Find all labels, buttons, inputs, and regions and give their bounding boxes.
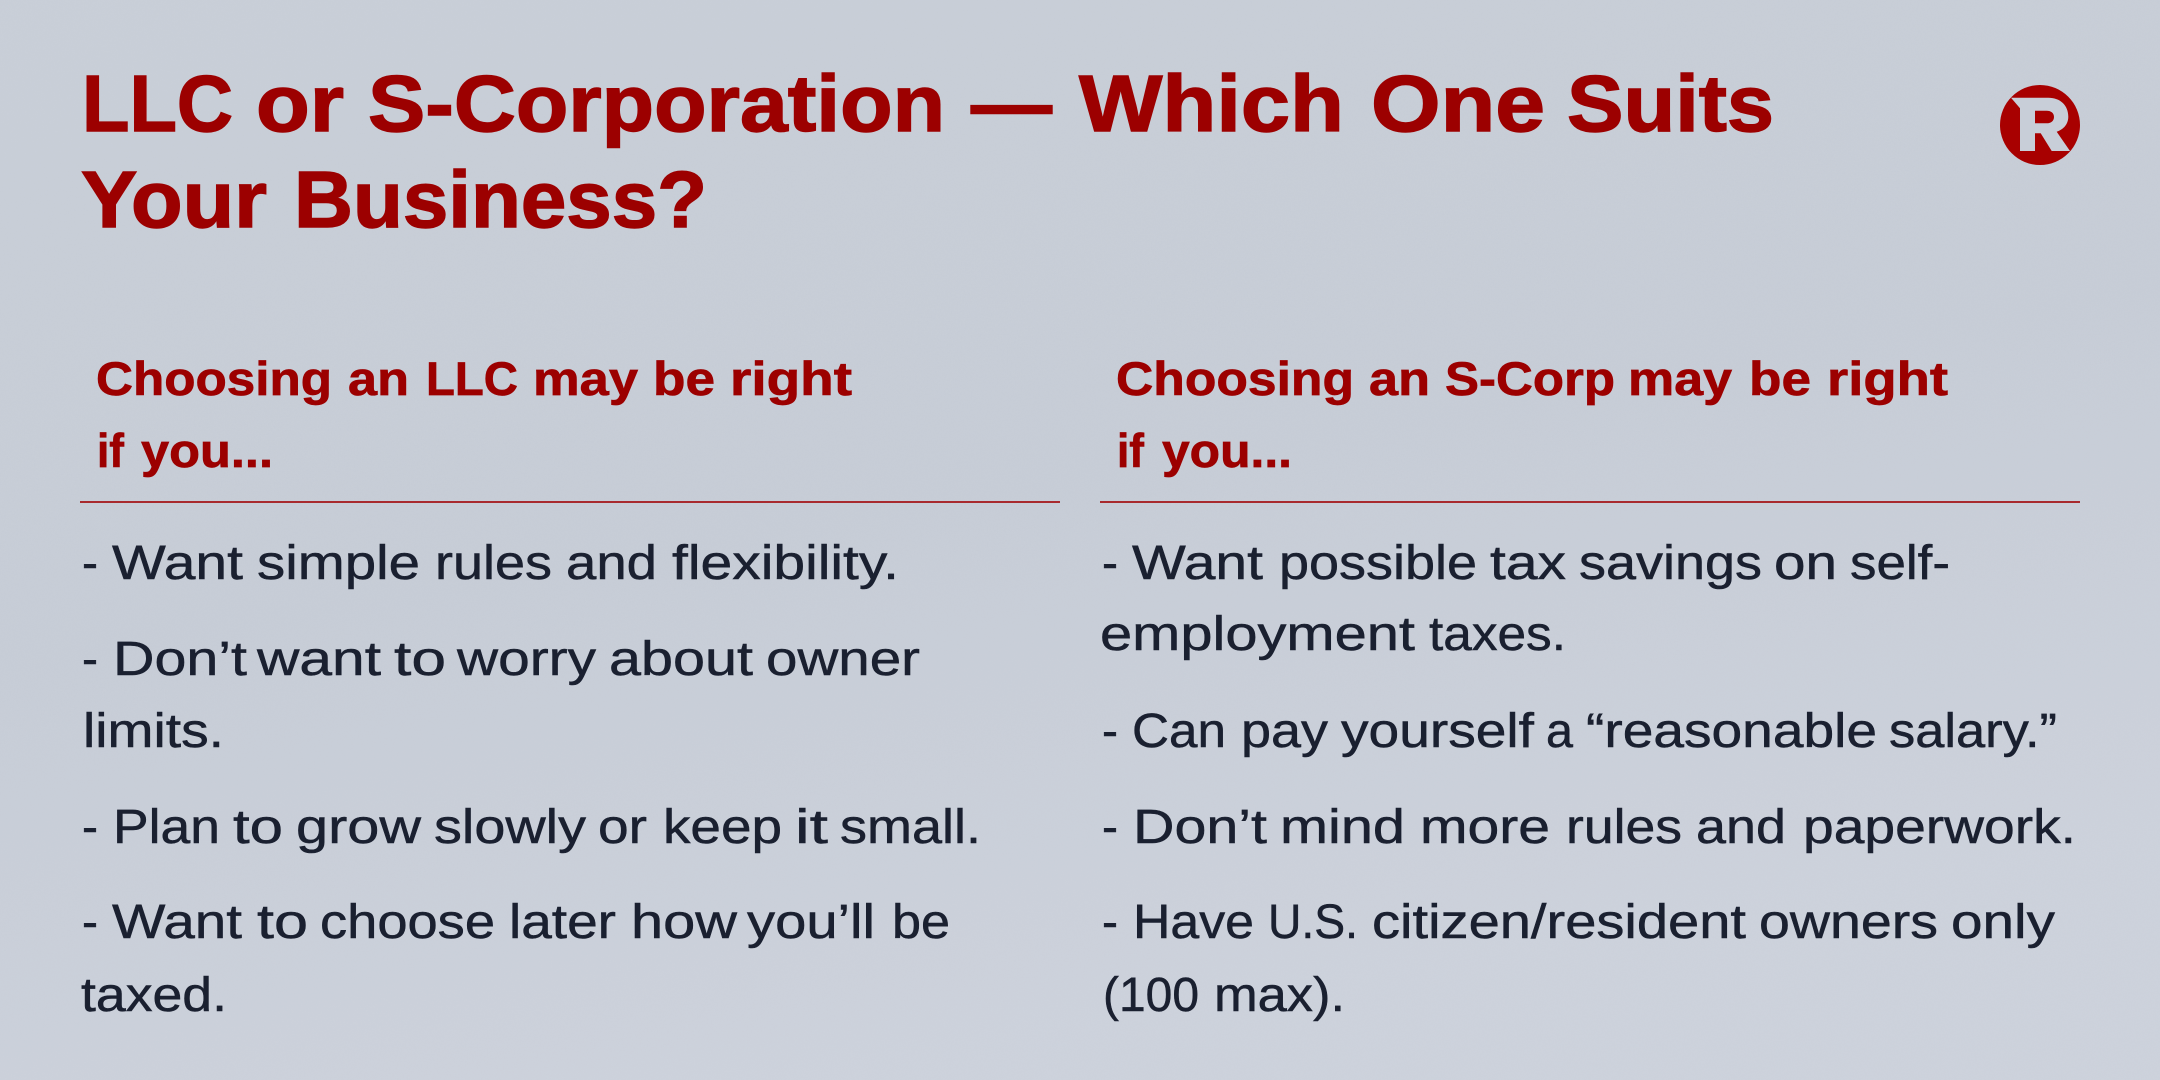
text block: LLC reasons: Don’t (113, 633, 247, 686)
text block: LLC reasons: to (394, 633, 446, 686)
text block: S-Corp reasons: Can (1132, 705, 1226, 758)
text block: LLC reasons: small. (840, 801, 981, 854)
heading: LLC: you... (141, 424, 273, 477)
icon: R logo (2000, 85, 2080, 165)
text block: LLC reasons: owner (766, 633, 920, 686)
text block: LLC reasons: - (82, 801, 98, 854)
text block: LLC reasons: keep (663, 801, 782, 854)
text block: S-Corp reasons: and (1696, 801, 1786, 854)
title: Which (1079, 59, 1344, 148)
heading: S-Corp: right (1827, 352, 1948, 405)
text block: LLC reasons: about (609, 633, 753, 686)
text block: S-Corp reasons: tax (1490, 537, 1566, 590)
text block: S-Corp reasons: Don’t (1133, 801, 1267, 854)
heading: LLC: Choosing (96, 352, 332, 405)
heading: LLC: be (653, 352, 715, 405)
text block: S-Corp reasons: employment (1100, 608, 1415, 661)
panel: S-Corp column (1100, 352, 2080, 1022)
text block: LLC reasons: - (82, 537, 98, 590)
text block: LLC reasons: you’ll (747, 896, 875, 949)
text block: S-Corp reasons: pay (1241, 705, 1328, 758)
title (81, 59, 1774, 244)
text block: LLC reasons: to (233, 801, 283, 854)
text block: S-Corp reasons: rules (1566, 801, 1682, 854)
heading: LLC: if (97, 424, 124, 477)
text block: LLC reasons: worry (456, 633, 596, 686)
heading: LLC: right (730, 352, 852, 405)
text block: S-Corp reasons: more (1420, 801, 1550, 854)
text block: S-Corp reasons: Want (1132, 537, 1263, 590)
text block: S-Corp reasons: citizen/resident (1372, 896, 1746, 949)
text block: S-Corp reasons: owners (1759, 896, 1938, 949)
title: or (256, 59, 344, 148)
text block: S-Corp reasons: mind (1280, 801, 1405, 854)
text block: LLC reasons: later (509, 896, 616, 949)
text block: S-Corp reasons: max). (1214, 969, 1345, 1022)
text block: LLC reasons: Plan (113, 801, 220, 854)
text block: LLC reasons: Want (112, 896, 242, 949)
heading: LLC: LLC (426, 352, 518, 405)
text block: LLC reasons: be (892, 896, 950, 949)
text block: LLC reasons: how (631, 896, 737, 949)
title: One (1371, 59, 1545, 148)
text block: S-Corp reasons: “reasonable (1586, 705, 1877, 758)
text block: S-Corp reasons: - (1102, 801, 1118, 854)
heading: LLC: may (533, 352, 638, 405)
text block: LLC reasons: limits. (83, 705, 224, 758)
text block: LLC reasons: grow (296, 801, 421, 854)
text block: LLC reasons: it (795, 801, 828, 854)
text block: S-Corp reasons: U.S. (1268, 896, 1358, 949)
text block: S-Corp reasons (1100, 537, 2076, 1022)
text block: LLC reasons: Want (112, 537, 243, 590)
text block: S-Corp reasons: (100 (1103, 969, 1199, 1022)
text block: S-Corp reasons: yourself (1341, 705, 1535, 758)
text block: S-Corp reasons: possible (1279, 537, 1477, 590)
title: — (971, 59, 1052, 148)
text block: S-Corp reasons: taxes. (1429, 608, 1566, 661)
title: LLC (82, 59, 233, 148)
text block: LLC reasons: taxed. (81, 969, 227, 1022)
heading: S-Corp: you... (1162, 424, 1292, 477)
text block: S-Corp reasons: self- (1850, 537, 1950, 590)
title: Suits (1567, 59, 1774, 148)
heading: S-Corp: if (1117, 424, 1144, 477)
text block: LLC reasons: simple (257, 537, 420, 590)
text block: LLC reasons: - (82, 896, 98, 949)
text block: LLC reasons: want (256, 633, 381, 686)
text block: S-Corp reasons: paperwork. (1803, 801, 2076, 854)
divider: S-Corp (1100, 501, 2080, 503)
text block: LLC reasons: to (257, 896, 308, 949)
text block: S-Corp reasons: - (1102, 896, 1118, 949)
text block: S-Corp reasons: Have (1133, 896, 1254, 949)
text block: S-Corp reasons: - (1102, 537, 1118, 590)
text block: LLC reasons (81, 537, 981, 1022)
title: Business? (294, 155, 707, 244)
heading: S-Corp: Choosing (1116, 352, 1354, 405)
text block: LLC reasons: - (82, 633, 98, 686)
heading: LLC (96, 352, 852, 477)
heading: S-Corp: may (1628, 352, 1732, 405)
text block: LLC reasons: slowly (434, 801, 586, 854)
text block: S-Corp reasons: - (1102, 705, 1118, 758)
text block: LLC reasons: flexibility. (672, 537, 899, 590)
heading: S-Corp (1116, 352, 1948, 477)
text block: S-Corp reasons: savings (1579, 537, 1762, 590)
heading: S-Corp: S-Corp (1445, 352, 1615, 405)
divider: LLC (80, 501, 1060, 503)
text block: LLC reasons: rules (435, 537, 552, 590)
panel: LLC column (80, 352, 1060, 1022)
heading: LLC: an (348, 352, 409, 405)
heading: S-Corp: be (1749, 352, 1811, 405)
text block: LLC reasons: or (598, 801, 647, 854)
text block: S-Corp reasons: on (1774, 537, 1837, 590)
text block: LLC reasons: choose (320, 896, 495, 949)
title: S-Corporation (368, 59, 945, 148)
text block: S-Corp reasons: only (1951, 896, 2055, 949)
title: Your (81, 155, 267, 244)
heading: S-Corp: an (1369, 352, 1430, 405)
text block: S-Corp reasons: salary.” (1889, 705, 2057, 758)
text block: LLC reasons: and (566, 537, 657, 590)
text block: S-Corp reasons: a (1546, 705, 1573, 758)
